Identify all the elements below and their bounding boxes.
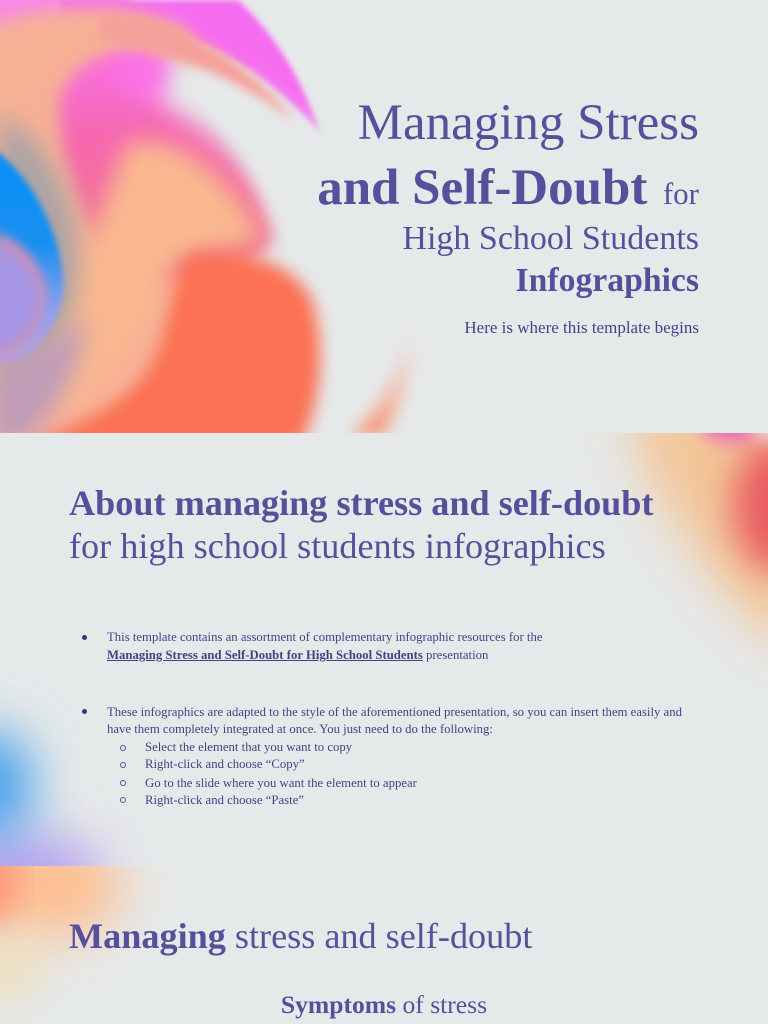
heading line: for high school students: for high school students infographics (69, 526, 606, 566)
heading: managing stress and self-doubt: Managing stress and self-doubt (69, 916, 532, 956)
bullet list: about text: Right-click and choose “Copy” (145, 757, 305, 771)
bullet list: about text: Right-click and choose “Paste” (145, 793, 304, 807)
subtitle: Here is where this template begins (464, 318, 699, 337)
bullet list: about text: Go to the slide where you want the element to appear (145, 776, 417, 790)
title line: Infographics: Infographics (516, 262, 699, 299)
heading: about: About managing stress and self-doubt (69, 483, 653, 523)
title: slide 1: Managing Stress (358, 95, 699, 151)
title line: and Self-Doubt for: and Self-Doubt for (317, 160, 699, 216)
bullet list: about text (82, 630, 682, 807)
title line: High School Students: High School Students (402, 220, 699, 257)
bullet list: about text: This template contains an assortment of complementary infographic resources for the (107, 630, 542, 644)
bullet list: about text: Managing Stress and Self-Doubt for High School Students presentation (107, 648, 488, 662)
bullet list: about text: Select the element that you want to copy (145, 740, 352, 754)
bullet list: about text: These infographics are adapted to the style of the aforementioned presentation, so you can insert them easily and (107, 705, 682, 719)
subheading: symptoms of stress: Symptoms of stress (281, 990, 487, 1019)
bullet list: about text: have them completely integrated at once. You just need to do the following: (107, 722, 493, 736)
